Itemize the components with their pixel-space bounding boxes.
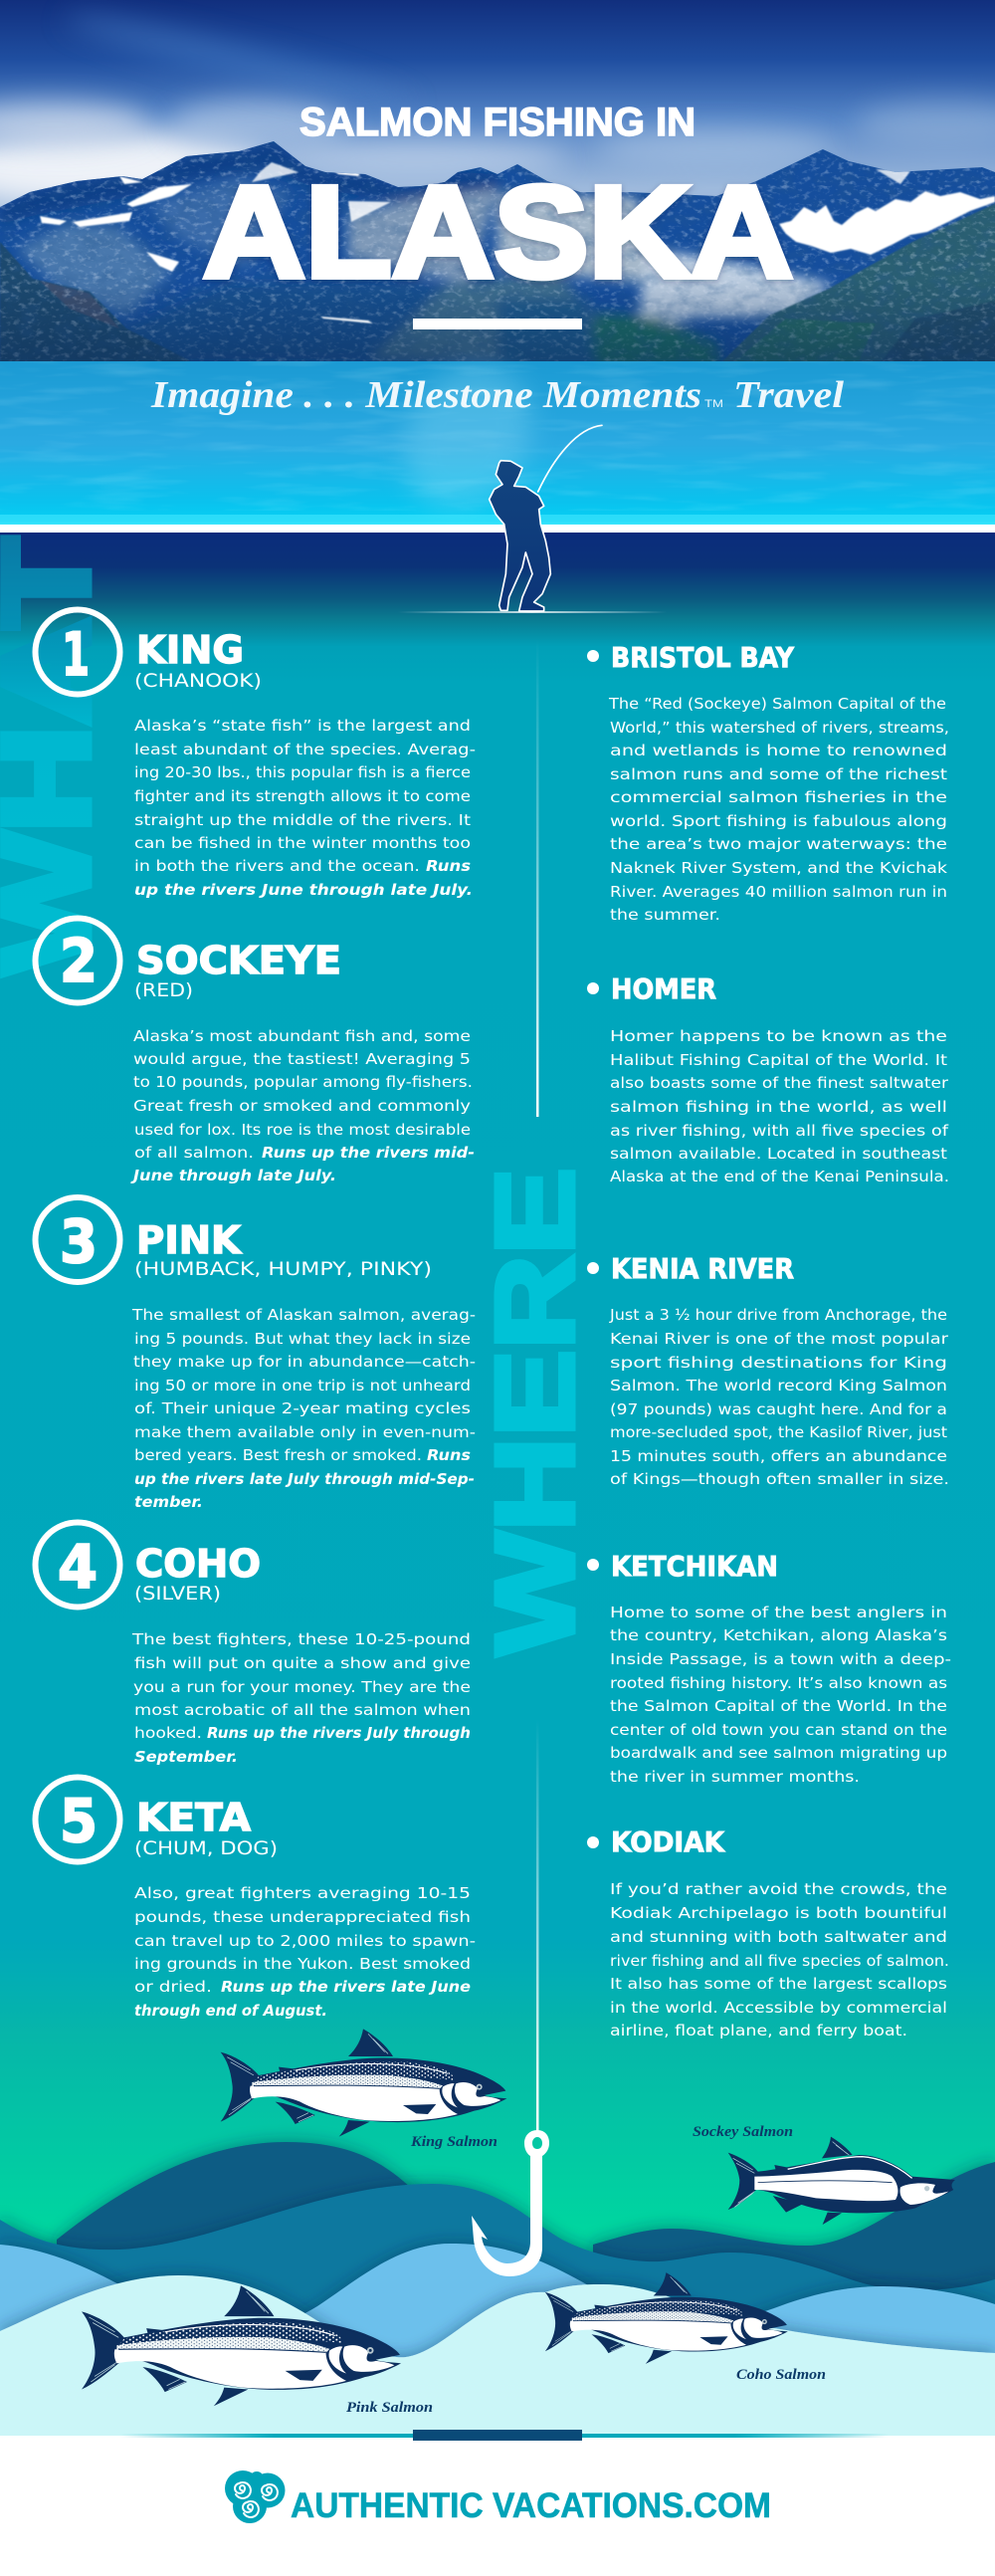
body text: Also, great fighters averaging 10-15 [134,1884,471,1902]
body text: up the rivers June through late July. [134,881,473,899]
body text: of Kings—though often smaller in size. [610,1470,949,1488]
body text: Runs up the rivers July through [207,1724,471,1742]
vertical divider lower: fishing line [536,1719,539,2132]
body text [131,1630,471,1766]
number 2 badge: 2 [60,927,98,996]
fish: Coho salmon [545,2272,788,2364]
body text: Runs [427,1446,471,1464]
body text: ing 5 pounds. But what they lack in size [134,1330,471,1348]
body text: salmon available. Located in southeast [610,1145,947,1163]
body text: salmon runs and some of the richest [610,765,947,783]
body text: bered years. Best fresh or smoked. [134,1446,422,1464]
body text: would argue, the tastiest! Averaging 5 [133,1050,471,1068]
footer dark bar [413,2430,582,2441]
body text: June through late July. [130,1167,336,1184]
body text: Halibut Fishing Capital of the World. It [610,1051,947,1069]
foreground rock left [0,242,195,368]
body text: they make up for in abundance—catch- [133,1353,476,1371]
body text: world. Sport fishing is fabulous along [610,812,947,830]
body text: ing 50 or more in one trip is not unheard [134,1377,471,1395]
icon: fisherman silhouette [398,425,667,613]
bullet [587,1559,599,1571]
body text: ing grounds in the Yukon. Best smoked [134,1955,471,1973]
bullet [587,982,599,994]
body text [610,1027,949,1185]
subheading: (CHUM, DOG) [134,1837,278,1859]
number 4 badge: 4 [58,1533,98,1603]
body text [131,1306,476,1511]
panel: Bristol Bay [587,641,949,924]
body text: commercial salmon fisheries in the [610,788,947,806]
body text: fish will put on quite a show and give [134,1654,471,1672]
body text: Salmon. The world record King Salmon [610,1377,947,1395]
body text: straight up the middle of the rivers. It [134,811,471,829]
body text: to 10 pounds, popular among fly-fishers. [133,1073,473,1091]
heading Kodiak: KODIAK [611,1825,725,1858]
sky with clouds [0,0,995,368]
big vertical word WHERE: WHERE [473,1168,597,1655]
heading Homer: HOMER [611,972,716,1005]
body text: river fishing and all five species of salmon. [610,1952,949,1970]
water [0,343,995,533]
body text: hooked. [134,1724,202,1742]
body text: used for lox. Its roe is the most desirable [134,1121,471,1139]
body text: 15 minutes south, offers an abundance [610,1447,947,1465]
body text [608,695,949,924]
body text: Runs [426,857,471,875]
footer panel [0,2430,995,2576]
body text: more-secluded spot, the Kasilof River, just [610,1423,947,1441]
body text: Alaska’s “state fish” is the largest and [134,717,471,735]
body text: as river fishing, with all five species of [610,1122,949,1140]
label: Pink Salmon: Pink Salmon [346,2400,433,2416]
body text: rooted fishing history. It’s also known as [610,1674,947,1692]
subheading: (SILVER) [134,1583,221,1605]
icon: fish hook [472,2130,549,2276]
body text: pounds, these underappreciated fish [134,1908,471,1926]
number 3 badge [36,1197,119,1282]
body text: The smallest of Alaskan salmon, averag- [131,1306,476,1324]
body text: (97 pounds) was caught here. And for a [610,1400,947,1418]
body text: Inside Passage, is a town with a deep- [610,1650,951,1668]
panel: Sockeye salmon [36,918,475,1184]
panel: Coho salmon [36,1523,471,1766]
subheading: (CHANOOK) [134,670,262,692]
number 5 badge: 5 [60,1787,98,1856]
fish: Pink salmon [82,2285,401,2406]
body text: ing 20-30 lbs., this popular fish is a fierce [134,763,471,781]
body text: September. [134,1748,238,1766]
heading Sockeye: SOCKEYE [136,939,341,982]
body text: in the world. Accessible by commercial [610,1999,947,2017]
illustration: layered ocean waves [0,2142,995,2436]
body text: or dried. [134,1978,212,1996]
body text: sport fishing destinations for King [610,1354,947,1372]
fish: Sockeye salmon [728,2137,955,2225]
panel: Keta salmon [36,1778,476,2020]
body text [134,717,476,899]
number 4 badge [36,1523,119,1607]
body text: also boasts some of the finest saltwater [610,1074,949,1092]
heading Coho: COHO [135,1542,261,1586]
body text: of all salmon. [134,1144,254,1162]
label: Coho Salmon: Coho Salmon [736,2367,826,2383]
body text: World,” this watershed of rivers, streams, [610,719,949,737]
body text: Naknek River System, and the Kvichak [610,859,947,877]
panel: Homer [587,972,949,1185]
body text: you a run for your money. They are the [133,1678,471,1696]
label: King Salmon: King Salmon [410,2134,498,2150]
body text: and stunning with both saltwater and [610,1928,947,1946]
panel: King salmon [36,609,476,899]
foreground slope right [721,199,995,368]
body text: can travel up to 2,000 miles to spawn- [134,1932,476,1950]
body text: If you’d rather avoid the crowds, the [610,1880,947,1898]
bullet [587,650,599,662]
label: Sockey Salmon: Sockey Salmon [693,2124,793,2140]
heading Keta: KETA [136,1796,252,1839]
body text: most acrobatic of all the salmon when [134,1701,471,1719]
heading Pink: PINK [136,1218,243,1262]
number 2 badge [36,918,119,1003]
body text [134,1884,476,2020]
tagline: Imagine . . . Milestone Moments [150,374,701,416]
body text: of. Their unique 2-year mating cycles [134,1399,471,1417]
body text: can be fished in the winter months too [134,834,471,852]
body text: River. Averages 40 million salmon run in [610,883,947,901]
body text: Alaska’s most abundant fish and, some [133,1027,471,1045]
tagline: Travel [733,374,844,416]
body text: up the rivers late July through mid-Sep- [134,1470,475,1488]
page background gradient [0,533,995,2436]
body text: the river in summer months. [610,1768,860,1786]
body text: airline, float plane, and ferry boat. [610,2022,907,2039]
body text: and wetlands is home to renowned [610,742,947,759]
body text: Home to some of the best anglers in [610,1604,947,1621]
body text [610,1604,951,1786]
heading Bristol Bay: BRISTOL BAY [611,641,795,674]
hero photo: Alaskan mountains and water [0,0,995,533]
title: Salmon Fishing in: SALMON FISHING IN [299,101,696,144]
bullet [587,1262,599,1274]
snowfields [40,162,995,323]
heading Kenia River: KENIA RIVER [611,1252,794,1285]
panel: Ketchikan [587,1550,951,1786]
body text: The best fighters, these 10-25-pound [131,1630,471,1648]
heading Ketchikan: KETCHIKAN [611,1550,778,1583]
number 3 badge: 3 [60,1207,98,1277]
panel: Pink salmon [36,1197,476,1511]
logo: wordmark: AUTHENTIC VACATIONS.COM [291,2486,771,2525]
body text: through end of August. [134,2002,327,2020]
body text [610,1880,949,2039]
body text: the summer. [610,906,720,924]
body text: Just a 3 ½ hour drive from Anchorage, the [609,1306,947,1324]
title: Alaska: ALASKA [203,158,793,305]
bullet [587,1836,599,1848]
body text: the country, Ketchikan, along Alaska’s [610,1626,947,1644]
body text: Kodiak Archipelago is both bountiful [610,1904,947,1922]
body text [609,1306,949,1488]
mountain range [0,129,995,368]
body text [130,1027,475,1184]
number 5 badge [36,1778,119,1861]
body text: make them available only in even-num- [134,1423,476,1441]
fish: King salmon [221,2029,506,2137]
body text: the Salmon Capital of the World. In the [610,1697,947,1715]
body text: Great fresh or smoked and commonly [133,1097,471,1115]
logo: swirl mark [225,2470,285,2523]
title underline [413,319,582,329]
body text: Kenai River is one of the most popular [610,1330,949,1348]
body text: Runs up the rivers late June [221,1978,471,1996]
heading King: KING [136,628,244,672]
body text: the area’s two major waterways: the [610,835,947,853]
footer accent line [120,2434,889,2438]
body text: salmon fishing in the world, as well [610,1098,947,1116]
panel: Kodiak [587,1825,949,2039]
number 1 badge [36,609,119,695]
subheading: (RED) [134,979,193,1001]
body text: The “Red (Sockeye) Salmon Capital of the [608,695,946,713]
body text: boardwalk and see salmon migrating up [610,1744,947,1762]
body text: center of old town you can stand on the [610,1721,947,1739]
body text: tember. [134,1493,203,1511]
body text: fighter and its strength allows it to come [134,787,471,805]
body text: Alaska at the end of the Kenai Peninsula. [610,1168,949,1185]
tagline: TM [704,398,723,410]
body text: Runs up the rivers mid- [262,1144,475,1162]
subheading: (HUMBACK, HUMPY, PINKY) [134,1258,432,1280]
body text: in both the rivers and the ocean. [134,857,420,875]
body text: It also has some of the largest scallops [610,1975,947,1993]
body text: Homer happens to be known as the [610,1027,947,1045]
body text: least abundant of the species. Averag- [134,741,476,758]
number 1 badge: 1 [62,620,90,690]
panel: Kenia River [587,1252,949,1488]
vertical divider upper [536,639,539,1117]
white horizon band [0,525,995,533]
